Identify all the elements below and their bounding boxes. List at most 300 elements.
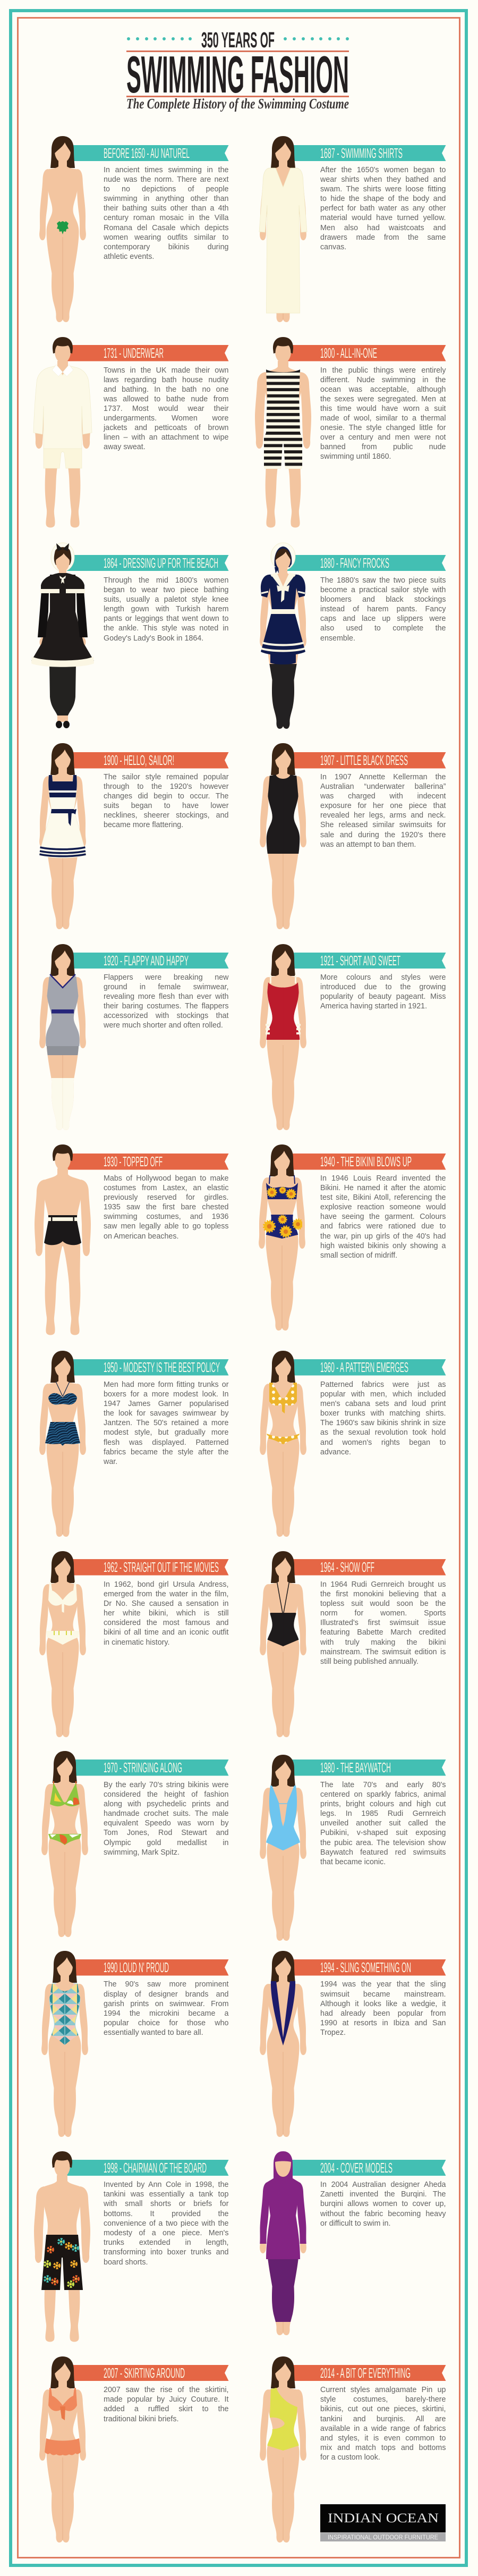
text: their bathing suits other than a 4th (104, 204, 228, 213)
text: ground in female swimwear, (104, 983, 228, 991)
pants (49, 664, 76, 715)
panel: 1962 (32, 1551, 234, 1742)
text: swimsuit became mainstream. (320, 1990, 446, 1999)
text: have seeing the garment. Colours (320, 1213, 446, 1221)
ribbon (73, 145, 228, 161)
text: In 2004 Australian designer Aheda (320, 2181, 446, 2189)
tagline: INSPIRATIONAL OUTDOOR FURNITURE (328, 2535, 438, 2541)
ribbon (287, 555, 446, 571)
subtitle: The Complete History of the Swimming Costume (126, 96, 349, 112)
ribbon (32, 1959, 234, 1976)
shirt (33, 366, 92, 449)
bonnet (51, 543, 74, 571)
text: 1935 saw the first bare chested (104, 1203, 228, 1211)
text: swimming costumes, and 1936 (104, 1213, 228, 1221)
panel: 1920 (39, 944, 228, 1130)
ribbon (32, 2365, 234, 2381)
text: test site, Bikini Atoll, referencing the (320, 1193, 446, 1202)
ribbon (250, 2159, 451, 2176)
dots right (284, 37, 349, 40)
title (126, 28, 349, 112)
leggings (268, 2259, 298, 2322)
text: linen – with an attachment to wipe (104, 433, 228, 442)
text: She released similar swimsuits for (320, 821, 446, 829)
text: boxers for a more modest look. In (104, 1390, 228, 1399)
text (104, 1580, 228, 1647)
text: accessorized with stockings that (104, 1012, 228, 1020)
stockings (51, 1078, 74, 1130)
text: the sexes were segregated. Men at (320, 395, 446, 403)
text: men's cabana sets and loud print (320, 1400, 446, 1408)
text: popular with men, which included (320, 1390, 446, 1399)
panel: 1930 (35, 1144, 228, 1335)
text: that became iconic. (320, 1858, 386, 1866)
text: norm for women. Sports (320, 1609, 446, 1618)
text: 1990 at resorts in Ibiza and San (320, 2019, 446, 2027)
text: In the public things were entirely (320, 366, 446, 375)
text: this time would have worn a suit (320, 405, 446, 413)
text: convenience of a two piece with the (104, 2219, 228, 2228)
ribbon: 1900 - HELLO, SAILOR! (104, 752, 174, 768)
figure (39, 944, 86, 1130)
ribbon (250, 2365, 451, 2381)
text: bottoms. It provided the (104, 2210, 228, 2218)
text: swam. The shirts were loose fitting (320, 185, 446, 193)
halter (56, 1382, 70, 1396)
figure (260, 944, 306, 1130)
text: banned from public nude (320, 443, 446, 451)
text: costumes from Lastex, an elastic (104, 1184, 228, 1192)
text: considered the most famous and (104, 1619, 228, 1627)
text: Godey's Lady's Book in 1864. (104, 634, 203, 643)
text: was charged with indecent (320, 792, 446, 801)
panel: 2014 (260, 2356, 446, 2543)
panel: 1960 (250, 1351, 451, 1542)
text: Tom Jones, Rod Stewart and (104, 1829, 228, 1837)
text: Olympic gold medallist in (104, 1839, 228, 1847)
sunflower bikini (269, 1175, 295, 1184)
text: introduced due to the growing (320, 983, 446, 991)
title: 350 YEARS OF (201, 28, 275, 52)
text: necklines, sheerer stockings, and (104, 811, 228, 820)
text: fabrics became the style after the (104, 1448, 228, 1457)
text (320, 773, 446, 849)
text: pants or leggings that went down to (104, 614, 228, 623)
text: 2007 saw the rise of the skirtini, (104, 2386, 228, 2394)
text (320, 1380, 446, 1457)
sleeves (38, 591, 88, 637)
text: material would have turned yellow. (320, 214, 446, 222)
text: became more flattering. (104, 821, 183, 829)
text: 1947 James Garner popularised (104, 1400, 228, 1408)
figure (246, 1951, 320, 2148)
text: unveiled another suit called the (320, 1819, 446, 1828)
stripes (271, 609, 295, 614)
hands (39, 637, 46, 647)
text: had already been popular from (320, 2009, 446, 2018)
text: tankini was essentially a tank top (104, 2190, 228, 2199)
ribbon (294, 145, 446, 161)
figure (260, 743, 306, 929)
text: flesh was displayed. Patterned (104, 1438, 228, 1447)
text: and bathing. In the bath no one (104, 385, 228, 394)
ribbon: 1800 - ALL-IN-ONE (320, 345, 377, 361)
ribbon: 1920 - FLAPPY AND HAPPY (104, 953, 189, 969)
frock (261, 574, 305, 655)
white bikini (48, 1582, 77, 1605)
text: The 1960's saw bikinis shrink in size (320, 1419, 446, 1427)
text: By the early 70's string bikinis were (104, 1781, 228, 1789)
skirtini skirt (45, 2438, 81, 2455)
figure (33, 337, 92, 527)
ribbon: 1880 - FANCY FROCKS (320, 555, 389, 571)
text: America having started in 1921. (320, 1002, 427, 1011)
text: away sweat. (104, 443, 146, 451)
trunks (48, 1215, 77, 1217)
text: modest style, but gradually more (104, 1428, 228, 1437)
text (104, 2180, 228, 2267)
ribbon (32, 1359, 234, 1376)
text: Dr No. She caused a sensation in (104, 1600, 228, 1608)
text: Romana del Casale which depicts (104, 224, 228, 232)
stockings (269, 664, 297, 729)
text: women wearing outfits similar to (104, 233, 228, 242)
text: mix and match tops and bottoms (320, 2444, 446, 2452)
figure (35, 1144, 91, 1335)
cape (41, 573, 84, 592)
panel: 1880 (260, 542, 446, 729)
text: bloomers and black stockings (320, 595, 446, 604)
ribbon: 2007 - SKIRTING AROUND (104, 2365, 185, 2381)
text: nude was the norm. There are next (104, 175, 228, 184)
figure (24, 2151, 99, 2347)
text: Towns in the UK made their own (104, 366, 228, 375)
text: began to wear two piece bathing (104, 586, 228, 594)
sailor collar (270, 573, 296, 592)
text: bikini of all time and an iconic outfit (104, 1628, 228, 1637)
polka bikini (269, 1383, 297, 1405)
text (103, 366, 228, 451)
text: 1994 the microkini became a (104, 2009, 228, 2018)
text (104, 773, 228, 829)
text: athletic events. (104, 252, 154, 261)
text: swimming, Mark Spitz. (104, 1848, 180, 1857)
panel: 1998 (32, 2151, 234, 2342)
text: century roman mosaic in the Villa (104, 214, 228, 222)
text: jackets and petticoats of brown (104, 424, 228, 432)
text: saw men legally able to go topless (104, 1222, 228, 1231)
text: swimming until 1860. (320, 452, 391, 461)
text: sale and during the 1920's there (320, 831, 446, 839)
text: to no depictions of people (104, 185, 228, 193)
text: Jantzen. The 50's retained a more (104, 1419, 228, 1427)
text: the first monokini believing that a (320, 1590, 446, 1598)
text: contemporary bikinis during (104, 243, 228, 251)
text: ensemble. (320, 634, 355, 643)
text: Zanetti invented the Burqini. The (320, 2190, 446, 2199)
ribbon (67, 555, 228, 571)
text (320, 2385, 446, 2462)
text: explosive reaction someone would (320, 1203, 446, 1211)
panel: 1921 (260, 944, 446, 1130)
text: Mabs of Hollywood began to make (104, 1174, 228, 1183)
text: modesty of a one piece. Men's (104, 2229, 228, 2237)
text: length gown with Turkish harem (104, 605, 228, 613)
text: popular choice for those who (104, 2019, 228, 2027)
text: as the sexual revolution took hold (320, 1428, 446, 1437)
text: Through the mid 1800's women (104, 576, 228, 585)
text (104, 1380, 228, 1467)
blue swimsuit (266, 1785, 300, 1850)
text (320, 1780, 446, 1867)
panel: before 1650 (39, 136, 228, 322)
dress (259, 168, 307, 313)
panel: 1990 (41, 1951, 228, 2137)
panel: 1864 (31, 542, 306, 2491)
text (104, 973, 228, 1030)
text: was an attempt to ban them. (320, 840, 416, 849)
text: Illustrated's first swimsuit issue (320, 1619, 446, 1627)
ribbon: 1980 - THE BAYWATCH (320, 1760, 391, 1775)
text: The late 70's and early 80's (320, 1781, 446, 1789)
sling suit (271, 1981, 295, 2045)
text: centered on sparkly fabrics, animal (320, 1790, 446, 1799)
text: More colours and styles were (320, 973, 446, 982)
ribbon: 2004 - COVER MODELS (320, 2159, 392, 2175)
ribbon (32, 2159, 234, 2176)
text: Pubikini, v-shaped suit exposing (320, 1829, 446, 1837)
text: suits began to have lower (104, 802, 228, 810)
figure (260, 1551, 306, 1737)
board shorts (41, 2235, 83, 2290)
icon: fig leaf (57, 221, 69, 234)
text: without the fabric becoming heavy (320, 2210, 446, 2218)
text: 1994 was the year that the sling (320, 1980, 446, 1989)
text (104, 166, 228, 261)
ribbon (32, 1760, 234, 1776)
panel: 2004 (260, 2151, 446, 2335)
figure (260, 542, 306, 729)
ribbon: BEFORE 1650 - AU NATUREL (104, 145, 190, 161)
panel: 1900 (39, 743, 228, 929)
text: revealed her legs, arms and neck. (320, 811, 446, 820)
text: legs. In 1985 Rudi Gernreich (320, 1809, 446, 1818)
text (320, 1174, 446, 1260)
ribbon (32, 1559, 234, 1576)
text: bikinis, cut out one pieces, skirtini, (320, 2405, 446, 2413)
ribbon: 1950 - MODESTY IS THE BEST POLICY (104, 1359, 220, 1375)
figure (39, 136, 86, 322)
text: essentially wanted to bare all. (104, 2028, 203, 2037)
text: made popular by Juicy Couture. It (104, 2395, 228, 2404)
figure (260, 2356, 306, 2543)
text: with truly making the bikini (320, 1638, 446, 1647)
text: The 1880's saw the two piece suits (320, 576, 446, 585)
text: In 1907 Annette Kellerman the (320, 773, 446, 781)
text: instead of harem pants. Fancy (320, 605, 446, 613)
text: transforming into boxer trunks and (104, 2248, 228, 2257)
text (320, 973, 446, 1011)
ribbon: 1731 - UNDERWEAR (104, 345, 164, 361)
text: and styles, it is even common to (320, 2434, 446, 2443)
text: Current styles amalgamate Pin up (320, 2386, 446, 2394)
red suit (271, 975, 295, 983)
text: Men also had waistcoats and (320, 224, 446, 232)
text: high waisted bikinis only showing a (320, 1242, 446, 1250)
text (320, 366, 446, 461)
dots left (127, 37, 192, 40)
panel: 2007 (32, 2356, 234, 2548)
bonnet (271, 543, 295, 570)
text: wear shirts when they bathed and (320, 175, 446, 184)
collar (52, 365, 73, 376)
ribbon: 1990 LOUD N' PROUD (104, 1959, 169, 1975)
text: trunks extended in length, (104, 2238, 228, 2247)
text: boxer trunks with matching shirts. (320, 1409, 446, 1418)
panel: 1800 (255, 337, 446, 527)
text (104, 1174, 228, 1241)
text (104, 2385, 228, 2424)
text: over a century and men were not (320, 433, 446, 442)
hood (274, 2151, 293, 2184)
figure (39, 743, 86, 929)
text (104, 1780, 228, 1857)
text (320, 2180, 446, 2228)
text: Invented by Ann Cole in 1998, the (104, 2181, 228, 2189)
panel: 1980 (250, 1751, 451, 1942)
ribbon (250, 1959, 451, 1976)
panel: 1994 (250, 1951, 451, 2142)
text: traditional bikini briefs. (104, 2415, 178, 2423)
text: caps and lace up slippers were (320, 614, 446, 623)
text: Flappers were breaking new (104, 973, 228, 982)
text: for a custom look. (320, 2453, 380, 2462)
text: prints, bright colours and high cut (320, 1800, 446, 1808)
striped suit (264, 369, 302, 469)
text: available in a wide range of fabrics (320, 2425, 446, 2433)
text: were much shorter and often rolled. (104, 1021, 223, 1030)
figure (259, 136, 307, 322)
text: Baywatch featured red swimsuits (320, 1848, 446, 1857)
bikini (48, 1393, 77, 1404)
ribbon (293, 1154, 446, 1169)
straps (277, 1582, 289, 1613)
psychedelic bikini (54, 1781, 76, 1789)
text: onesie. The style changed little for (320, 424, 446, 432)
text: Men had more form fitting trunks or (104, 1380, 228, 1389)
figure (25, 1551, 100, 1748)
text: The sailor style remained popular (104, 773, 228, 781)
text: Although it looks like a wedgie, it (320, 2000, 446, 2008)
text: equivalent Speedo was worn by (104, 1819, 228, 1828)
text: canvas. (320, 243, 346, 251)
text: suits, usually a paletot style knee (104, 595, 228, 604)
text: advance. (320, 1448, 351, 1457)
panel: 1940 (259, 1144, 446, 1331)
text: and fabrics were rationed due to (320, 1222, 446, 1231)
ribbon (250, 1760, 451, 1776)
text: in cinematic history. (104, 1638, 169, 1647)
shorts (44, 448, 82, 468)
figure (260, 2151, 306, 2335)
text: still being published annually. (320, 1657, 419, 1666)
ribbon (73, 953, 228, 969)
text: board shorts. (104, 2258, 148, 2267)
text: added a ruffled skirt to the (104, 2405, 228, 2413)
text: undergarments. Women wore (104, 414, 228, 423)
text: In 1962, bond girl Ursula Andress, (104, 1580, 228, 1589)
text: or difficult to swim in. (320, 2219, 390, 2228)
ribbon (73, 752, 228, 769)
text (320, 1580, 446, 1666)
panel: 1731 (33, 337, 228, 527)
ribbon: 1970 - STRINGING ALONG (104, 1760, 182, 1775)
text (320, 166, 446, 251)
text: emerged from the water in the film, (104, 1590, 228, 1598)
text: war. (104, 1458, 117, 1466)
figure (25, 1351, 100, 1547)
text: In ancient times swimming in the (104, 166, 228, 174)
panel: 1907 (260, 743, 446, 929)
text: laws regarding bath house nudity (104, 376, 228, 384)
figure (246, 1351, 320, 1547)
text: become a practical sailor style with (320, 586, 446, 594)
figure (25, 2356, 100, 2553)
text: through to the 1920's however (104, 782, 228, 791)
gown (31, 575, 94, 664)
text: her white bikini, which is still (104, 1609, 228, 1618)
brand name: INDIAN OCEAN (328, 2511, 439, 2526)
text: previously reserved for girdles. (104, 1193, 228, 1202)
text (104, 1980, 228, 2038)
text (320, 1980, 446, 2038)
text: 1737. Most would wear their (104, 405, 228, 413)
text: popularity of beauty pageant. Miss (320, 992, 446, 1001)
ribbon (294, 752, 446, 769)
ribbon: 1998 - CHAIRMAN OF THE BOARD (104, 2159, 207, 2175)
text: topless suit would soon be the (320, 1600, 446, 1608)
text: handmade crochet suits. The male (104, 1809, 228, 1818)
text: Tropez. (320, 2028, 346, 2037)
panel: 1950 (39, 1351, 299, 2491)
figure (255, 337, 311, 527)
text: mainstream. The swimsuit edition is (320, 1648, 446, 1656)
text: small section of midriff. (320, 1251, 397, 1260)
text: ocean was acceptable, although (320, 385, 446, 394)
text (320, 576, 446, 643)
ribbon: 1964 - SHOW OFF (320, 1559, 374, 1575)
figure (28, 1751, 102, 1948)
text: drawers made from the same (320, 233, 446, 242)
panel: 1964 (260, 1551, 446, 1737)
text: the ankle. This style was noted in (104, 624, 228, 633)
text: tankini and burqinis. All are (320, 2415, 446, 2423)
text: changes did begin to occur. The (104, 792, 228, 801)
text: In 1964 Rudi Gernreich brought us (320, 1580, 446, 1589)
text: Bikini. He named it after the atomic (320, 1184, 446, 1192)
text: on American beaches. (104, 1232, 178, 1241)
figure (259, 1144, 305, 1331)
text: swimming in anything other than (104, 195, 228, 203)
figure (31, 542, 94, 728)
logo: Indian Ocean (320, 2504, 446, 2541)
panel: 1970 (32, 1751, 234, 1942)
text: along with psychedelic prints and (104, 1800, 228, 1808)
bow (68, 809, 76, 826)
figure (41, 1951, 88, 2137)
dress (39, 775, 86, 858)
panel: 1687 (259, 136, 446, 322)
